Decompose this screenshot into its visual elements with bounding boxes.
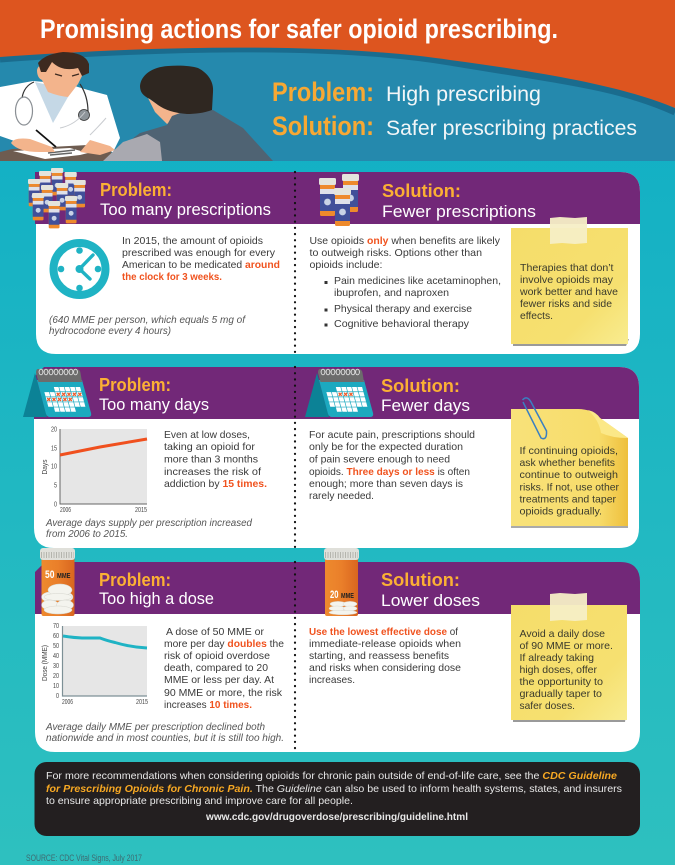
title: Promising actions for safer opioid prescribing. (40, 14, 558, 44)
divider (294, 367, 296, 549)
callout: guideline box (34, 762, 640, 836)
solution line (272, 111, 637, 141)
heading: problem: Problem: (99, 375, 171, 395)
sticky note: daily dose: Avoid a daily dose (520, 629, 605, 640)
heading: problem: Too many days (99, 395, 209, 414)
icon: calendar with many days (23, 369, 91, 417)
doctor (0, 52, 120, 152)
icon: 50 MME bottle: 50 (45, 569, 54, 581)
text: use opioids only: Use opioids only when benefits are likely (310, 236, 501, 247)
sticky note: daily dose: gradually taper to (520, 689, 602, 700)
text: 50 MME doubles: risk of opioid overdose (164, 651, 270, 662)
heading: problem (99, 570, 214, 608)
purple header (34, 367, 639, 419)
bullet list: Pain medicines like acetaminophen, (334, 276, 501, 287)
x axis labels: 2015 (135, 507, 147, 514)
sticky note: continuing opioids: If continuing opioids, (520, 446, 618, 457)
heading: solution (382, 181, 536, 221)
sticky note: continuing opioids: risks. If not, use other (520, 482, 620, 494)
purple header (35, 172, 640, 224)
y axis labels: 70 (53, 623, 59, 630)
solution line: Solution: (272, 111, 374, 141)
purple header (35, 562, 640, 614)
text: use opioids only: opioids include: (310, 260, 382, 271)
icon: calendar with few days (305, 369, 373, 417)
icon: few pill bottles (319, 174, 359, 226)
bullet list: ibuprofen, and naproxen (334, 288, 449, 299)
text: low doses: increases the risk of (164, 467, 261, 478)
desk and prescription paper (0, 130, 115, 161)
text: lowest effective dose: Use the lowest effective dose of (309, 627, 458, 638)
text: acute pain: enough; more than seven days is (309, 479, 463, 490)
text: 50 MME doubles: A dose of 50 MME or (166, 627, 265, 638)
text: low doses: addiction by 15 times. (164, 479, 267, 490)
icon: 50 MME bottle: MME (57, 573, 71, 580)
sticky note: therapies: involve opioids may (520, 275, 614, 286)
text: low doses (164, 430, 267, 490)
text: low doses: taking an opioid for (164, 442, 256, 453)
y axis labels: 30 (53, 663, 59, 670)
text: 2015 amount: the clock for 3 weeks. (122, 272, 222, 283)
sticky note: therapies (511, 217, 629, 346)
y axis labels: 15 (51, 446, 57, 452)
y axis labels: 60 (53, 633, 59, 640)
sticky note: therapies: effects. (520, 311, 553, 322)
text: MME note: (640 MME per person, which equals 5 mg of (49, 315, 246, 326)
text: dose note: nationwide and in most counties, but it is still too high. (46, 733, 284, 744)
text: MME note (49, 315, 246, 337)
icon: 20 MME bottle: MME (341, 593, 354, 600)
callout: guideline box: www.cdc.gov/drugoverdose/prescribing/guideline.html (205, 812, 468, 823)
bullet list: Cognitive behavioral therapy (334, 319, 470, 330)
card background (35, 614, 640, 752)
heading: solution: Lower doses (381, 591, 480, 610)
orange title band (0, 49, 675, 112)
icon: clock (54, 243, 106, 295)
text: 2015 amount: American to be medicated around (122, 260, 280, 271)
sticky note: therapies: work better and have (519, 287, 618, 298)
line chart: days (42, 426, 147, 514)
text: acute pain: opioids. Three days or less is often (309, 467, 470, 478)
text: acute pain: of pain severe enough to need (309, 454, 450, 466)
doctor and patient illustration (0, 52, 273, 161)
text: acute pain: For acute pain, prescriptions should (309, 430, 475, 441)
panel: too many days (23, 367, 639, 549)
heading: solution: Fewer prescriptions (382, 202, 536, 221)
text: lowest effective dose (309, 627, 461, 686)
panel: too many prescriptions (28, 168, 640, 354)
banner blue field (0, 40, 675, 161)
heading: solution: Fewer days (381, 396, 470, 415)
text: 2015 amount: prescribed was enough for every (122, 248, 276, 259)
text: acute pain (309, 430, 475, 502)
x axis labels (62, 699, 148, 706)
heading: solution: Solution: (382, 181, 461, 201)
text: 2015 amount (122, 236, 280, 283)
sticky note: daily dose: the opportunity to (520, 677, 603, 688)
y axis labels: 40 (53, 653, 59, 660)
text: acute pain: only be for the expected duration (309, 442, 463, 453)
text: 50 MME doubles: increases 10 times. (164, 700, 252, 711)
y axis labels: 10 (53, 683, 59, 690)
heading: solution (381, 376, 470, 415)
source note: SOURCE: CDC Vital Signs, July 2017 (26, 853, 142, 863)
text: 50 MME doubles: MME or less per day. At (164, 675, 274, 686)
text: days note: from 2006 to 2015. (46, 529, 128, 540)
callout: guideline box: for Prescribing Opioids for Chronic Pain. The Guideline can also be used to inform health systems, states, and insurers (46, 784, 622, 795)
teal trend line (63, 636, 147, 648)
patient (103, 66, 273, 161)
heading: problem (99, 375, 209, 414)
card background (34, 367, 639, 548)
heading: problem: Problem: (99, 570, 171, 590)
text: lowest effective dose: and risks when considering dose (309, 663, 461, 674)
text: use opioids only: to outweigh risks. Options other than (310, 248, 482, 259)
text: days note (45, 518, 252, 540)
solution line: Safer prescribing practices (386, 116, 637, 140)
divider (294, 562, 296, 752)
sticky note: continuing opioids: continue to outweigh (520, 470, 618, 481)
sticky note: daily dose: If already taking (520, 653, 594, 664)
icon: 20 MME bottle (324, 548, 359, 616)
sticky note: daily dose: safer doses. (520, 701, 575, 712)
sticky note: continuing opioids: treatments and taper (520, 494, 617, 506)
sticky note: daily dose: high doses, offer (520, 665, 598, 676)
callout: guideline box: to ensure appropriate prescribing and improve care for all people. (46, 796, 353, 807)
plot area (62, 626, 147, 696)
heading: solution: Solution: (381, 570, 460, 590)
divider (294, 172, 296, 354)
sticky note: therapies: Therapies that don’t (520, 263, 614, 274)
heading: problem: Too many prescriptions (100, 200, 271, 219)
heading: solution: Solution: (381, 376, 460, 396)
callout: guideline box: For more recommendations when considering opioids for chronic pain outside of end-of-life care, see the CDC Guideline (46, 771, 617, 782)
line chart: dose (42, 623, 148, 706)
y axis labels: 0 (56, 693, 59, 700)
panel: too high a dose (35, 548, 640, 752)
axis title: Dose (MME) (42, 645, 49, 681)
y axis labels: 5 (54, 482, 57, 490)
sticky note: therapies: fewer risks and side (520, 299, 612, 310)
heading: problem (100, 180, 271, 219)
orange trend line (60, 439, 147, 455)
problem line (272, 77, 541, 107)
heading: problem: Too high a dose (99, 589, 214, 608)
icon: paperclip (522, 398, 547, 439)
text: 50 MME doubles: death, compared to 20 (164, 663, 268, 674)
text: 2015 amount: In 2015, the amount of opioids (122, 236, 263, 247)
bullet list: Physical therapy and exercise (334, 304, 472, 315)
text: use opioids only (310, 236, 501, 271)
y axis labels: 20 (53, 673, 59, 680)
card background (35, 172, 640, 354)
y axis labels: 0 (54, 502, 57, 508)
x axis labels (60, 507, 147, 514)
problem line: High prescribing (386, 82, 541, 106)
icon: many pill bottles (28, 168, 86, 228)
y axis labels: 20 (51, 426, 57, 434)
axis title: Days (42, 459, 49, 474)
x axis labels: 2006 (62, 699, 73, 706)
text: low doses: more than 3 months (164, 454, 258, 466)
sticky note: continuing opioids: ask whether benefits (520, 458, 615, 469)
text: 50 MME doubles (164, 627, 284, 711)
text: dose note: Average daily MME per prescription declined both (45, 722, 265, 733)
x axis labels: 2015 (136, 699, 148, 706)
text: acute pain: rarely needed. (309, 491, 374, 502)
sticky note: continuing opioids (511, 398, 628, 528)
text: lowest effective dose: starting, and reassess benefits (309, 651, 449, 662)
plot area (60, 429, 147, 504)
text: MME note: hydrocodone every 4 hours) (49, 326, 171, 337)
y axis labels (51, 426, 57, 508)
text: lowest effective dose: increases. (309, 675, 355, 686)
text: 50 MME doubles: 90 MME or more, the risk (164, 688, 283, 699)
heading: problem: Problem: (100, 180, 172, 200)
text: days note: Average days supply per prescription increased (45, 518, 252, 529)
y axis labels: 50 (53, 643, 59, 650)
text: 50 MME doubles: more per day doubles the (164, 639, 284, 650)
y axis labels (53, 623, 59, 700)
icon: 20 MME bottle: 20 (330, 589, 338, 601)
problem line: Problem: (272, 77, 374, 107)
heading: solution (381, 570, 480, 610)
y axis labels: 10 (51, 464, 57, 470)
sticky note: continuing opioids: opioids gradually. (520, 506, 602, 518)
sticky note: daily dose (511, 593, 627, 722)
text: low doses: Even at low doses, (164, 430, 250, 441)
banner (0, 0, 675, 161)
sticky note: daily dose: of 90 MME or more. (520, 641, 613, 652)
text: lowest effective dose: immediate-release opioids when (309, 639, 461, 650)
icon: 50 MME bottle (40, 548, 75, 616)
text: dose note (45, 722, 284, 744)
x axis labels: 2006 (60, 507, 71, 514)
bullet list (324, 276, 501, 330)
